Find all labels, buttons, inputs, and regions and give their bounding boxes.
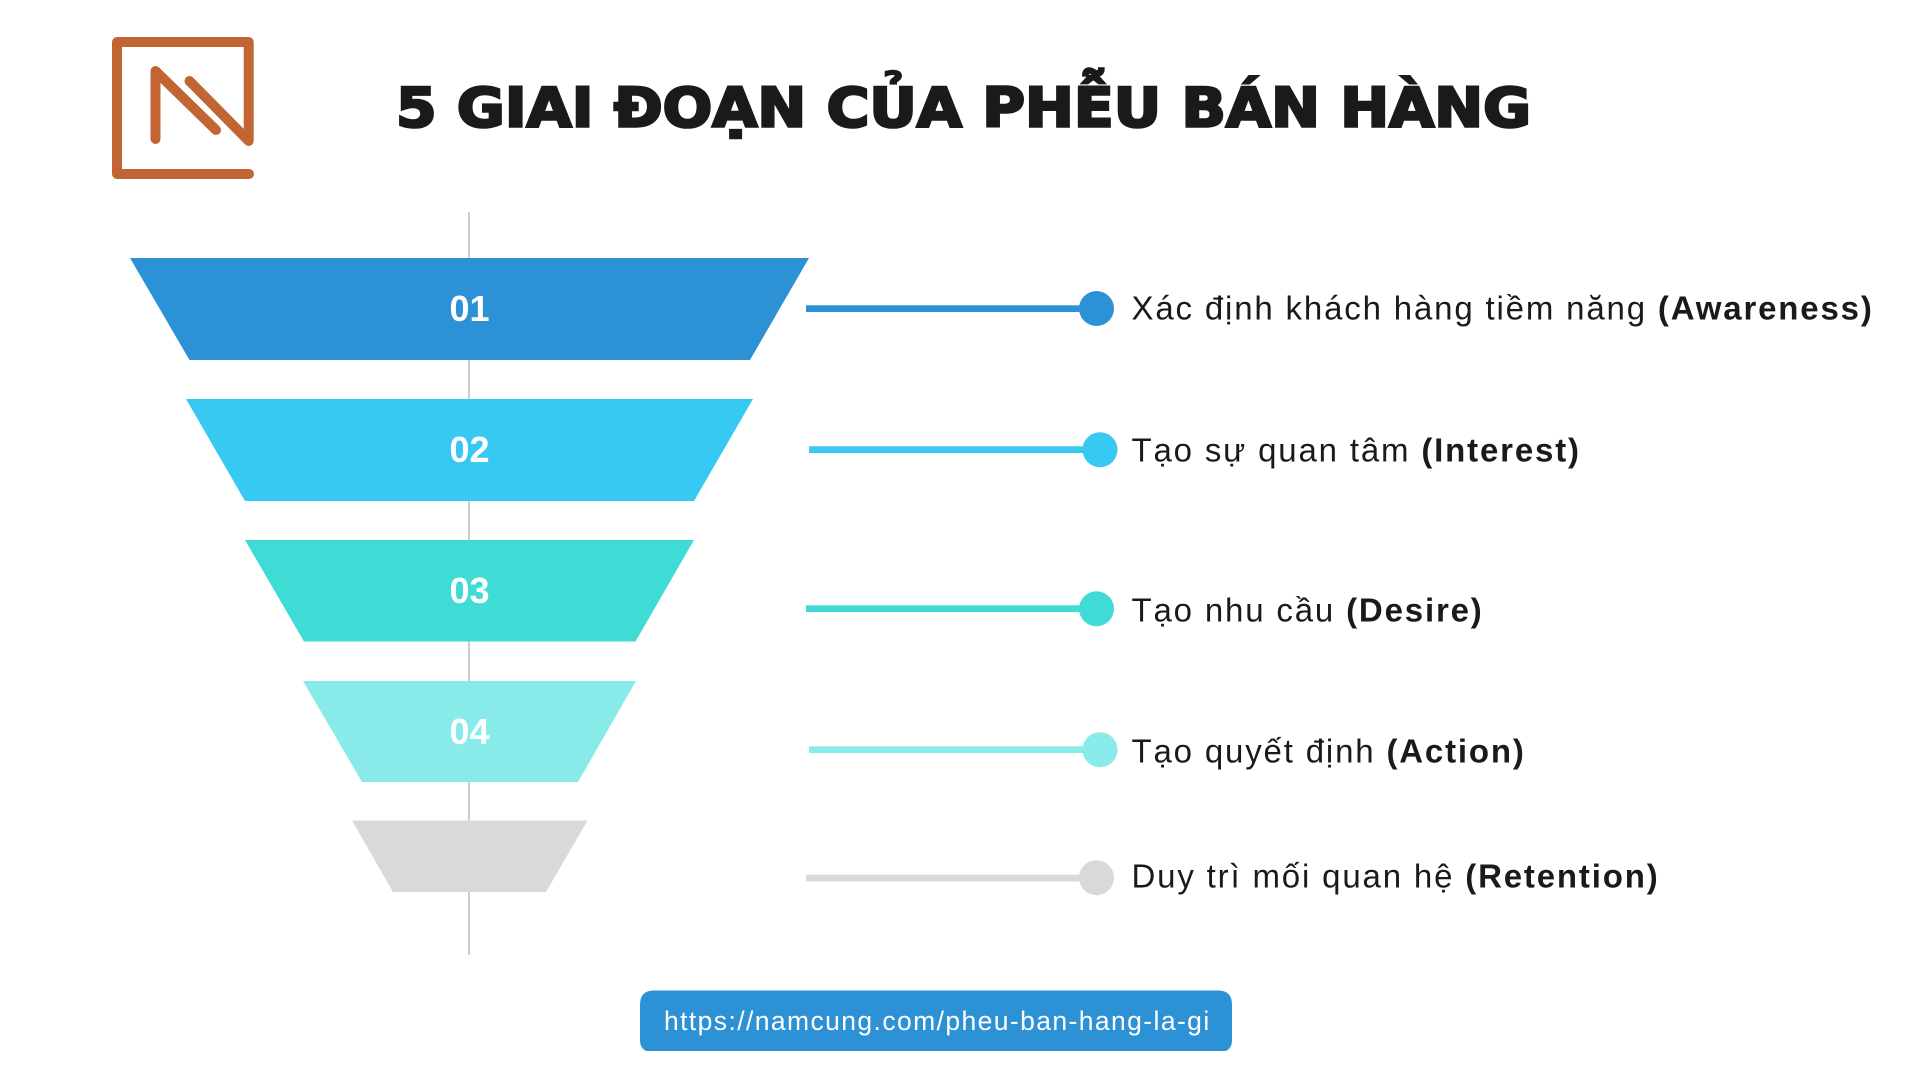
url button: https://namcung.com/pheu-ban-hang-la-gi (664, 1006, 1211, 1036)
connector 5 (806, 860, 1114, 895)
connector 4 (809, 732, 1118, 767)
connector 1 (806, 291, 1114, 326)
url button (640, 990, 1232, 1051)
funnel stage 3: 03 (449, 570, 490, 611)
funnel stage 3 (245, 540, 694, 642)
funnel stage 2 (186, 399, 753, 501)
connector 3 (806, 591, 1114, 626)
funnel stage 4: 04 (449, 711, 490, 752)
funnel center axis (468, 212, 470, 955)
logo (117, 42, 249, 174)
label 3: Tạo nhu cầu (Desire) (1132, 592, 1484, 629)
funnel stage 4 (303, 681, 636, 782)
funnel stage 2: 02 (449, 429, 490, 470)
label 1: Xác định khách hàng tiềm năng (Awareness) (1132, 289, 1874, 326)
funnel stage 1: 01 (449, 288, 490, 329)
connector 2 (809, 432, 1118, 467)
label 5: Duy trì mối quan hệ (Retention) (1132, 858, 1660, 895)
label 2: Tạo sự quan tâm (Interest) (1132, 431, 1581, 468)
funnel stage 1 (130, 258, 809, 360)
funnel stage 5 (352, 820, 588, 892)
label 4: Tạo quyết định (Action) (1132, 733, 1526, 770)
title: 5 GIAI ĐOẠN CỦA PHỄU BÁN HÀNG (396, 70, 1531, 140)
